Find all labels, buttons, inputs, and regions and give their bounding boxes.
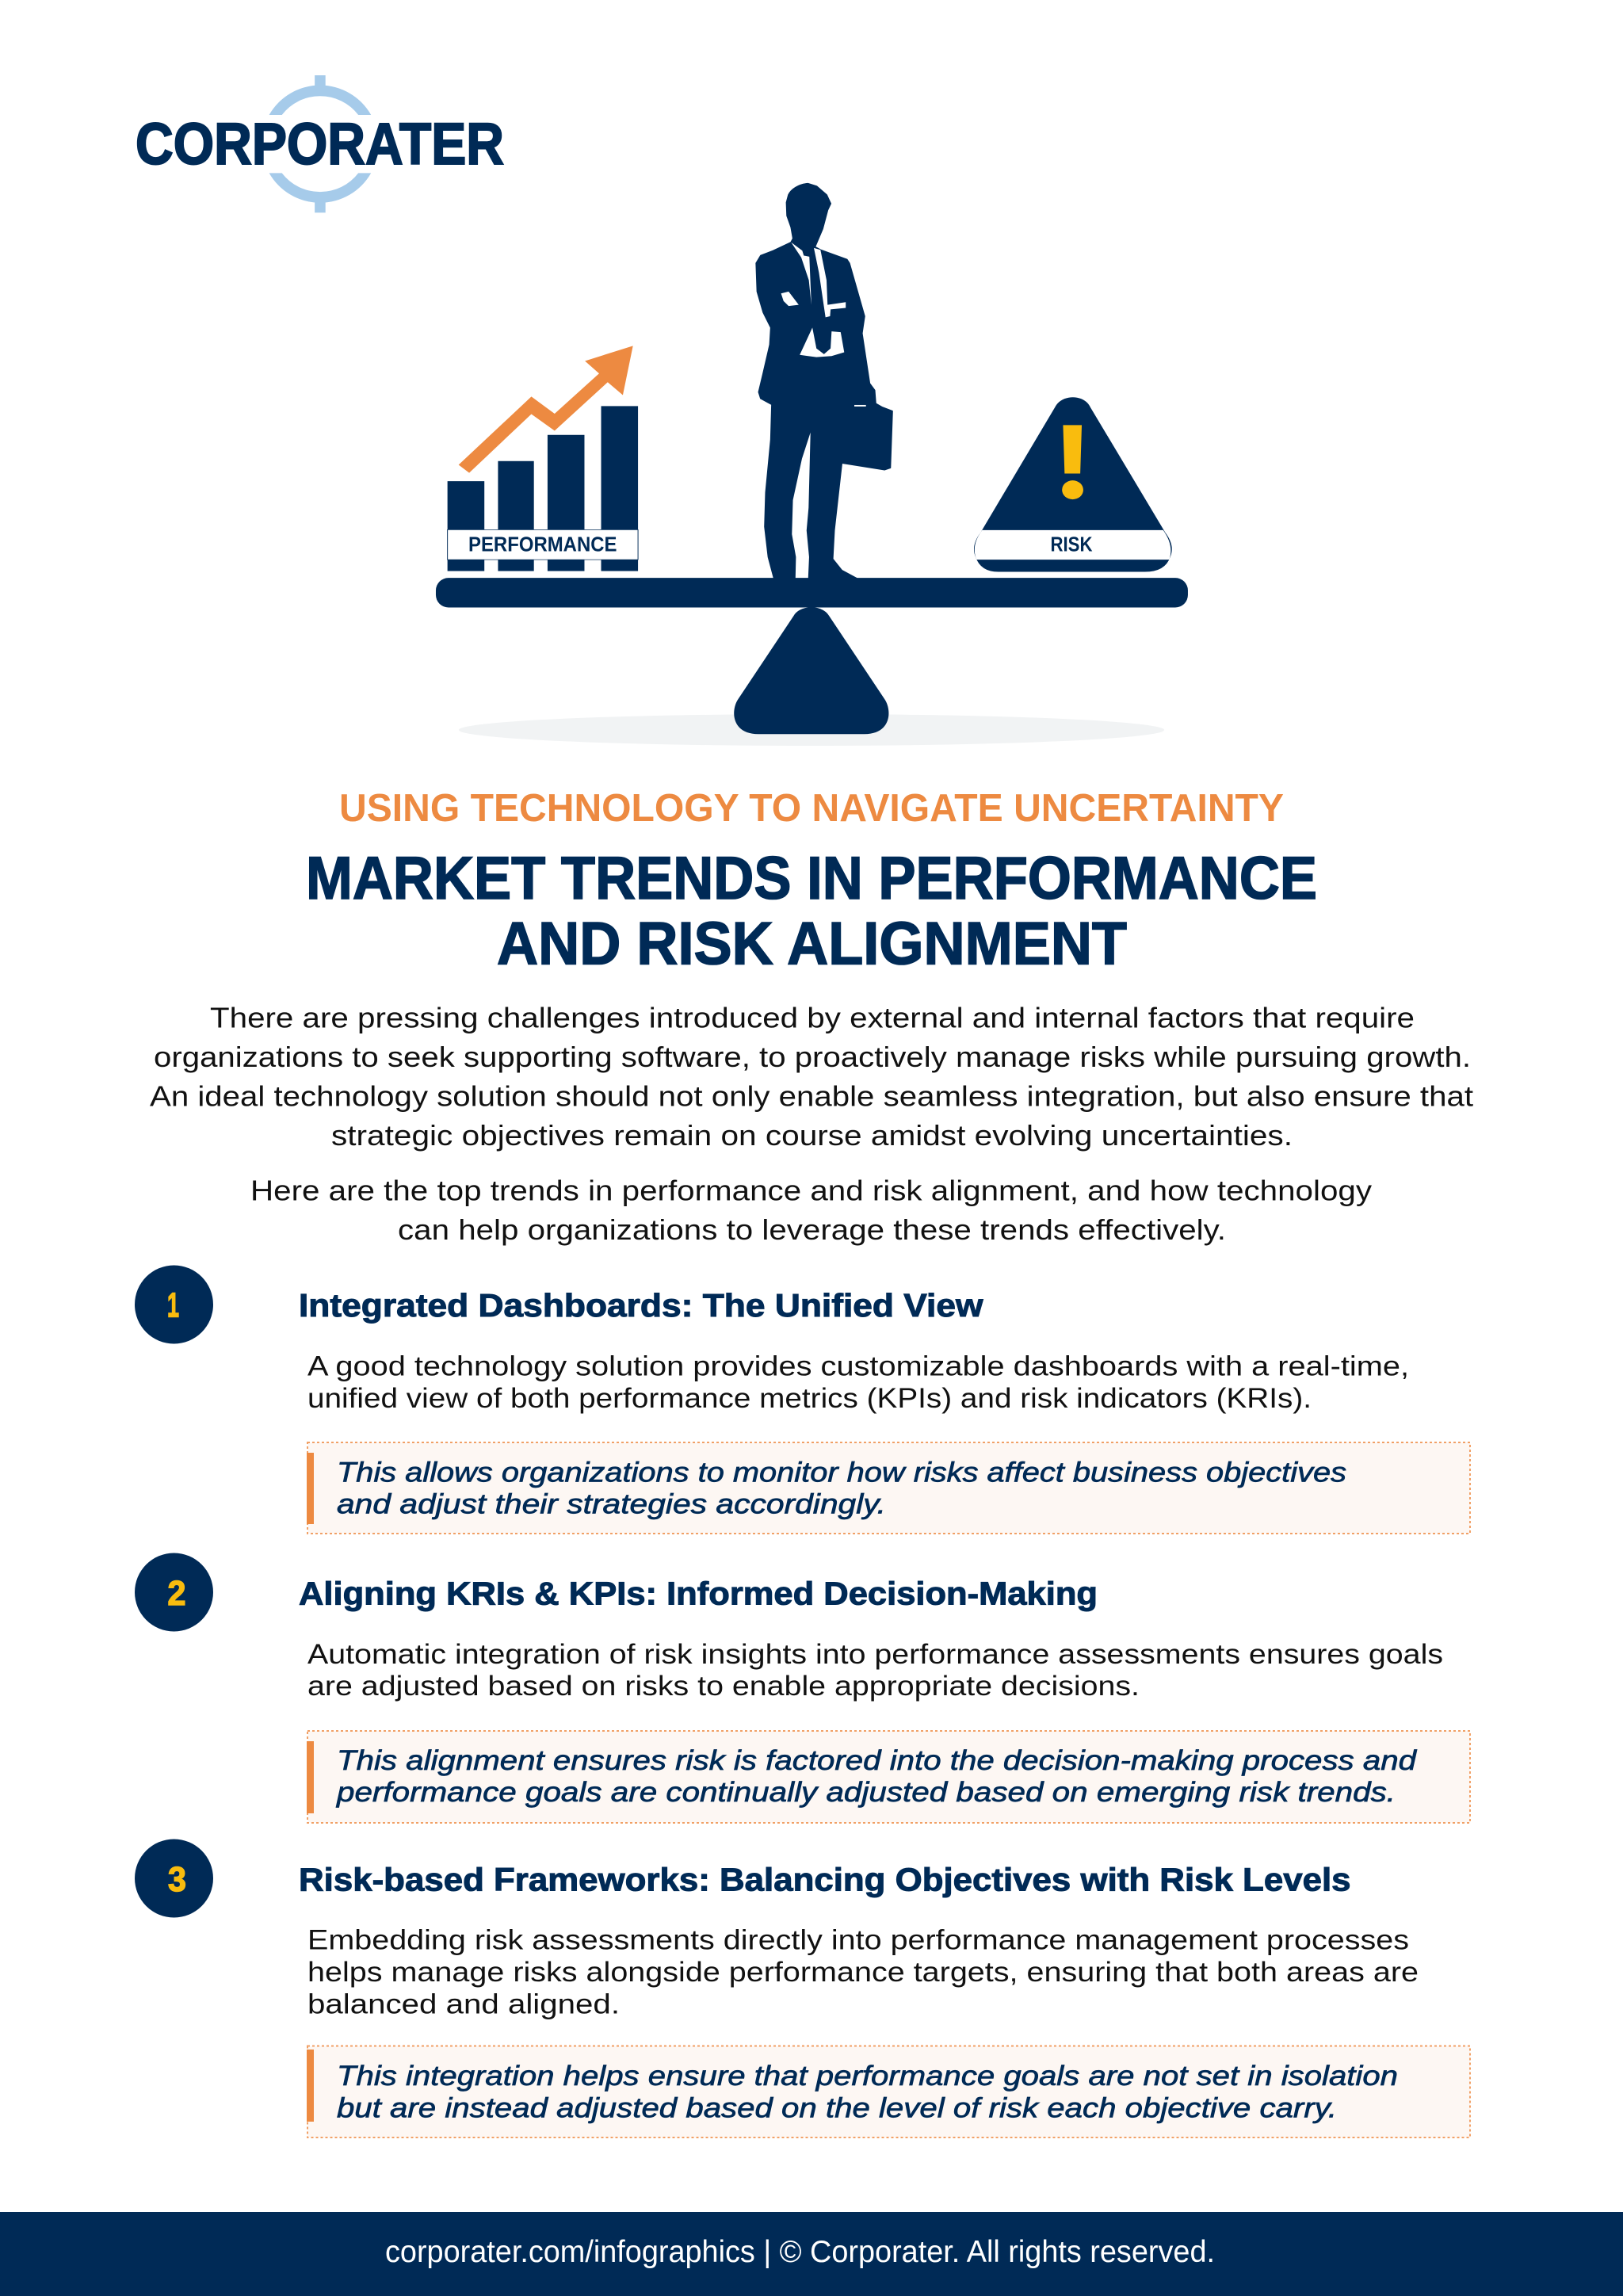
intro paragraph: There are pressing challenges introduced by external and internal factors that require: [210, 1002, 1415, 1033]
risk warning weight: [974, 397, 1172, 571]
title: AND RISK ALIGNMENT: [497, 910, 1127, 978]
body text: [307, 1639, 1443, 1702]
body text: helps manage risks alongside performance targets, ensuring that both areas are: [307, 1957, 1419, 1988]
heading: Integrated Dashboards: The Unified View: [299, 1287, 983, 1324]
logo wordmark: CORPORATER: [136, 111, 504, 177]
body text: unified view of both performance metrics (KPIs) and risk indicators (KRIs).: [307, 1383, 1312, 1414]
body text: A good technology solution provides customizable dashboards with a real-time,: [307, 1350, 1409, 1382]
intro paragraph: [150, 1002, 1473, 1152]
heading: Aligning KRIs & KPIs: Informed Decision-Making: [299, 1576, 1098, 1612]
intro paragraph: strategic objectives remain on course amidst evolving uncertainties.: [331, 1119, 1293, 1152]
body text: [307, 1350, 1409, 1414]
body text: are adjusted based on risks to enable appropriate decisions.: [307, 1671, 1140, 1702]
seesaw beam and fulcrum: [436, 578, 1188, 734]
subtitle: USING TECHNOLOGY TO NAVIGATE UNCERTAINTY: [339, 786, 1284, 830]
callout: This allows organizations to monitor how risks affect business objectives: [337, 1457, 1346, 1488]
intro paragraph: An ideal technology solution should not only enable seamless integration, but also ensure that: [150, 1079, 1473, 1113]
intro paragraph: organizations to seek supporting software, to proactively manage risks while pursuing growth.: [154, 1041, 1471, 1073]
body text: [307, 1924, 1419, 2019]
callout: but are instead adjusted based on the level of risk each objective carry.: [337, 2092, 1337, 2124]
callout: and adjust their strategies accordingly.: [337, 1488, 886, 1520]
number badge 3: 3: [168, 1860, 186, 1899]
body text: Automatic integration of risk insights into performance assessments ensures goals: [307, 1639, 1443, 1670]
callout: [307, 1442, 1470, 1534]
number badge 1: [135, 1265, 213, 1344]
footer bar: [0, 2212, 1623, 2296]
heading: Risk-based Frameworks: Balancing Objectives with Risk Levels: [299, 1861, 1350, 1897]
panel: trend 2: [135, 1553, 1470, 1823]
title: [306, 845, 1317, 978]
lead-in paragraph: [250, 1175, 1372, 1246]
businessman silhouette: [756, 184, 892, 580]
number badge 1: 1: [167, 1286, 179, 1325]
callout: [307, 2046, 1470, 2137]
lead-in paragraph: Here are the top trends in performance and risk alignment, and how technology: [250, 1175, 1372, 1206]
footer text: corporater.com/infographics | © Corporater. All rights reserved.: [385, 2235, 1215, 2269]
number badge 2: 2: [168, 1574, 185, 1613]
performance label: PERFORMANCE: [468, 534, 617, 556]
number badge 2: [135, 1553, 213, 1631]
performance bar chart: [448, 346, 638, 571]
logo: Corporater: [136, 75, 504, 212]
growth arrow: [459, 346, 633, 473]
body text: balanced and aligned.: [307, 1989, 620, 2019]
panel: trend 3: [135, 1839, 1470, 2137]
warning triangle: [974, 397, 1172, 571]
panel: trend 1: [135, 1265, 1470, 1534]
callout: This integration helps ensure that performance goals are not set in isolation: [337, 2061, 1398, 2092]
ground shadow: [459, 714, 1164, 746]
callout: performance goals are continually adjusted based on emerging risk trends.: [336, 1777, 1396, 1808]
risk label: RISK: [1051, 534, 1093, 556]
body text: Embedding risk assessments directly into performance management processes: [307, 1924, 1409, 1956]
callout: [307, 1731, 1470, 1823]
number badge 3: [135, 1839, 213, 1918]
logo crosshair ring: [269, 75, 371, 212]
illustration: balance scale with businessman: [436, 184, 1188, 746]
callout: This alignment ensures risk is factored into the decision-making process and: [337, 1745, 1418, 1776]
bars: [448, 406, 638, 571]
lead-in paragraph: can help organizations to leverage these trends effectively.: [398, 1213, 1226, 1246]
title: MARKET TRENDS IN PERFORMANCE: [306, 845, 1317, 912]
